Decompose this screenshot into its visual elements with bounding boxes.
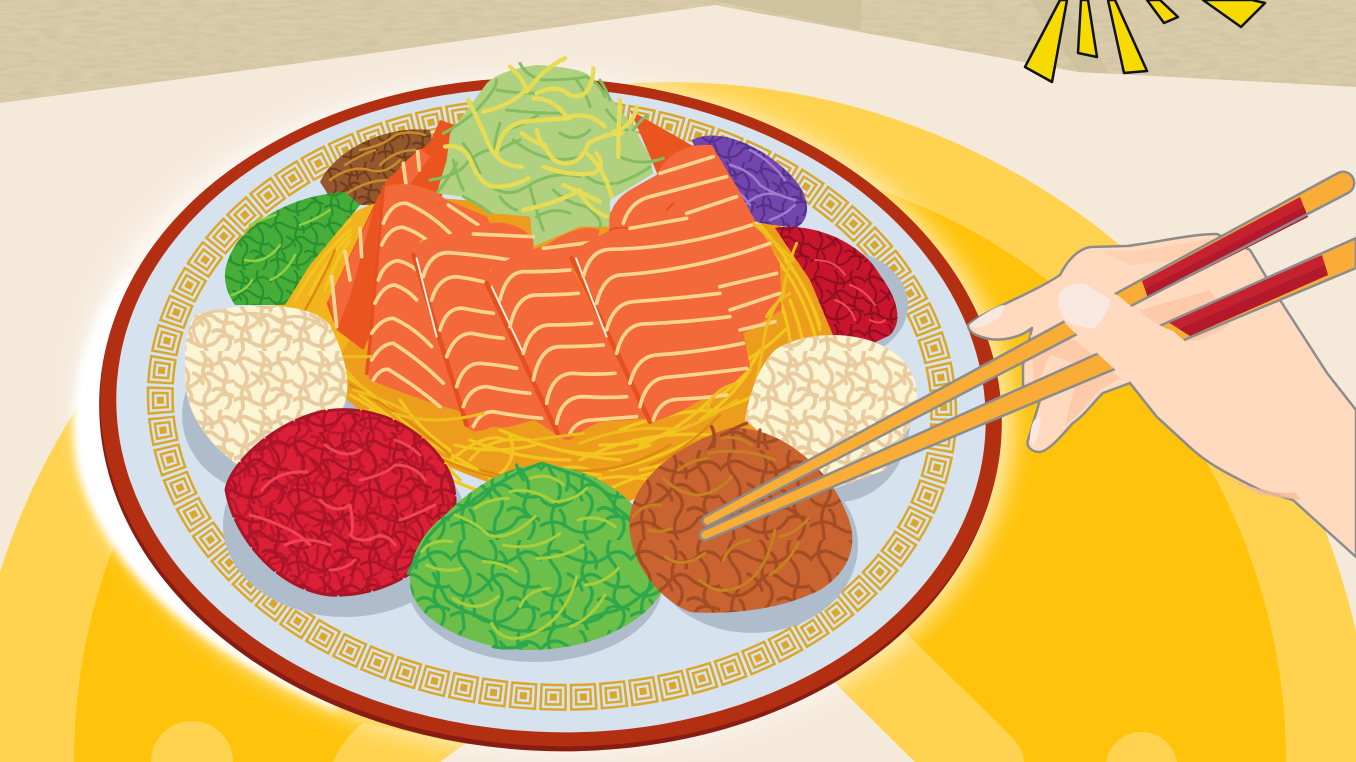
white plate shadow at left bbox=[74, 270, 340, 712]
back noodle mound: left green bbox=[225, 192, 360, 305]
back noodle mound: crimson right bbox=[775, 227, 897, 345]
thumb bbox=[1057, 283, 1230, 420]
finger shading bbox=[1030, 335, 1120, 425]
background circle: deep yellow bbox=[74, 156, 1286, 762]
burlap cloth background bbox=[0, 0, 1356, 110]
yellow sun rays bbox=[1025, 0, 1265, 82]
plate glow bbox=[60, 52, 1030, 762]
noodle mound: left cream bbox=[185, 306, 347, 470]
decorative circles at bottom bbox=[151, 721, 1177, 762]
thumb lower outline bbox=[1130, 383, 1193, 450]
mound shadows bbox=[182, 250, 910, 662]
hand base bbox=[968, 234, 1356, 557]
back noodle mound: purple bbox=[692, 136, 807, 228]
thumbnail bbox=[1058, 284, 1110, 329]
back orange salmon behind top pile bbox=[410, 110, 700, 200]
slice: centre left bbox=[413, 223, 558, 435]
slice: large right bbox=[572, 145, 782, 422]
greek key border bbox=[145, 91, 959, 717]
chopstick: upper bbox=[703, 172, 1354, 526]
back noodle mound: brown bbox=[320, 129, 440, 205]
plate bbox=[82, 55, 1019, 762]
diagonal light bands bbox=[333, 632, 1024, 762]
noodle mound: bottom green bbox=[408, 463, 663, 650]
noodles over salmon bbox=[343, 223, 797, 443]
noodle mound: right cream bbox=[745, 335, 917, 490]
slice: left bbox=[367, 184, 493, 412]
plate inner bbox=[100, 66, 1002, 754]
plate rim bbox=[83, 55, 1019, 762]
salmon slices bbox=[343, 145, 797, 443]
chopstick: lower bbox=[700, 238, 1356, 540]
middle fingernail bbox=[1030, 417, 1041, 446]
golden noodle nest bbox=[275, 195, 838, 512]
salmon slice: back left bbox=[327, 130, 448, 350]
hand holding chopsticks bbox=[700, 172, 1356, 557]
noodle mound: red bbox=[226, 410, 455, 595]
noodle mound: bottom brown bbox=[629, 423, 852, 613]
index fingernail bbox=[969, 305, 1004, 328]
top noodle pile: pale green bbox=[430, 58, 663, 247]
slice: centre bbox=[487, 228, 650, 440]
plate underside bbox=[82, 58, 1018, 762]
